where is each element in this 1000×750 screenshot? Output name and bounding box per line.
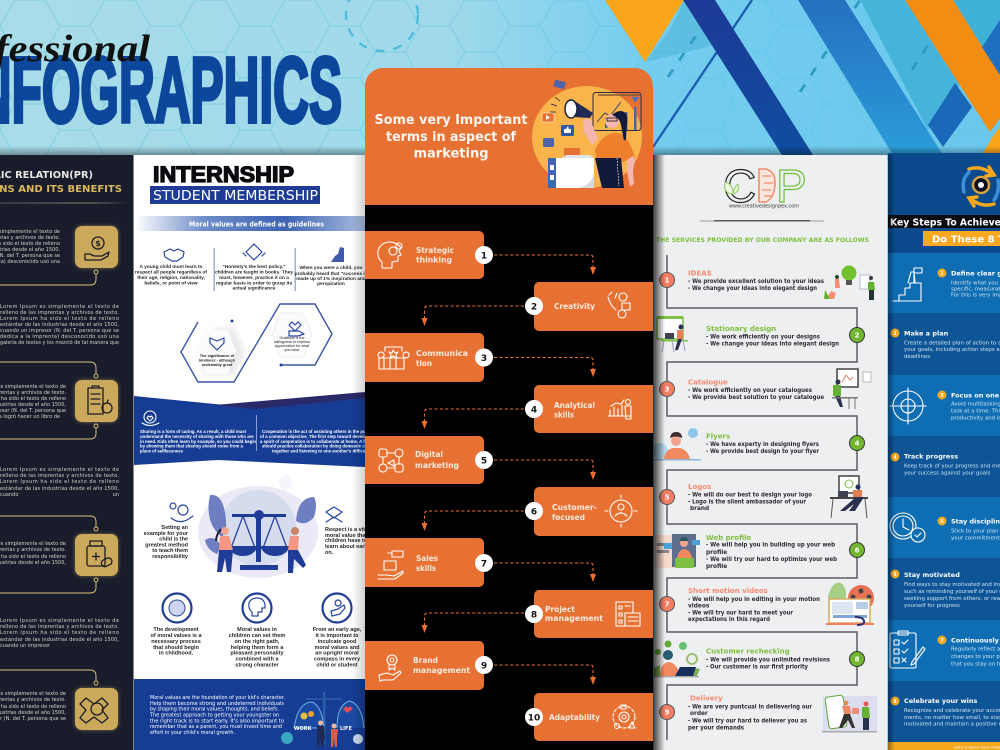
arrow 5 xyxy=(494,460,596,480)
service 6: web profile xyxy=(655,534,864,570)
hex text: gratitude: you have xyxy=(285,348,299,352)
circle item: development xyxy=(150,594,202,656)
service 1: ideas: IDEAS xyxy=(688,270,712,278)
text block 7 xyxy=(0,691,66,722)
text block 4: relleno de las imprentas y archivos de texto. xyxy=(0,473,119,479)
service 2: stationary design xyxy=(657,316,864,352)
step 5: digital marketing xyxy=(355,436,493,484)
step 1: strategic thinking: Strategic xyxy=(416,246,454,255)
step 9: brand management: Brand xyxy=(413,656,438,665)
panel: key steps xyxy=(888,153,1000,750)
step 1: strategic thinking xyxy=(355,231,493,279)
circle item: early age: child or student xyxy=(316,662,358,668)
text: responsibility: example for your xyxy=(144,531,189,537)
step 3: focus on one: Focus on one xyxy=(951,392,1000,400)
column: success xyxy=(295,247,368,287)
text block 4: Lorem Ipsum es simplemente el texto de xyxy=(0,467,119,473)
footer text: effort in your child's moral growth. xyxy=(150,730,235,736)
hexagon diagram xyxy=(181,304,332,382)
service 8: customer rechecking: 8 xyxy=(855,656,860,664)
step 2: creativity: Creativity xyxy=(554,302,596,311)
illustration: work life balance xyxy=(281,692,364,747)
sharing text: by showing them that sharing should come from a xyxy=(140,444,244,448)
text: responsibility: responsibility xyxy=(152,554,189,560)
text block 4: un xyxy=(113,492,119,498)
step 3: communication: tion xyxy=(416,359,432,368)
service 7: short motion videos: videos xyxy=(688,604,710,610)
step 3: communication xyxy=(355,333,493,382)
hex text: kindness: undeniably great xyxy=(202,363,233,367)
cooperation text: Cooperation is the act of assisting others in the pursuit xyxy=(262,429,375,434)
circle item: early age: From an early age, xyxy=(313,627,362,633)
text: respect: moral value that xyxy=(325,533,367,539)
step 7: continuously evaluate xyxy=(890,631,1000,668)
logo: CDP: P xyxy=(776,160,807,212)
illustration: flyer man xyxy=(652,428,701,460)
step 5: digital marketing: 5 xyxy=(481,456,487,466)
illustration: desk worker xyxy=(657,316,688,352)
footer text: the right track is to start early. It's also important to xyxy=(150,718,285,724)
text block 4 xyxy=(0,467,119,498)
step 2: make a plan: deadlines xyxy=(904,354,930,360)
service 5: logos: brand xyxy=(690,506,709,512)
column: respect people xyxy=(135,249,207,286)
footer text: Moral values are the foundation of your kid's character. xyxy=(150,695,285,701)
text block 2: cuando un impresor (N. del T. persona que se xyxy=(0,328,119,334)
heading: marketing xyxy=(374,113,528,162)
service 6: web profile: Web profile xyxy=(706,534,752,542)
column: honesty xyxy=(215,244,293,292)
service 8: customer rechecking xyxy=(654,640,864,677)
circle item: development: that should begin xyxy=(153,645,200,651)
column: success: made up of 1% inspiration and xyxy=(296,276,366,282)
circle item: early age xyxy=(313,594,362,668)
arrow 6 xyxy=(422,511,524,531)
text: responsibility: child is the xyxy=(159,536,188,542)
footer text: by shaping their moral values, thoughts, and beliefs. xyxy=(150,706,279,712)
service 9: delivery: order xyxy=(690,711,708,717)
icon: sales hand xyxy=(378,551,403,579)
illustration: customer support xyxy=(654,640,700,677)
step 6: stay motivated: yourself for progress xyxy=(904,603,960,609)
circle item: early age: it is important to xyxy=(315,633,359,639)
step 8: celebrate your wins: 8 xyxy=(893,699,897,705)
column: respect people: respect all people regardless of xyxy=(135,270,207,276)
arrow 4 xyxy=(422,409,524,429)
circle item: early age: moral values and xyxy=(315,645,359,651)
heading: marketing: Some very Important xyxy=(374,113,528,128)
text block 4: estándar de las industrias desde el año 1500, xyxy=(0,485,119,492)
icon: meeting xyxy=(378,347,409,369)
text: responsibility: to teach them xyxy=(152,548,188,554)
icon: social network xyxy=(379,449,403,472)
cooperation text xyxy=(260,430,365,454)
illustration: video editing xyxy=(826,583,874,625)
circle item: right path xyxy=(229,594,285,668)
column: respect people: beliefs, or point of view xyxy=(144,280,198,286)
circle item: development: necessary process xyxy=(151,639,201,645)
step 6: stay motivated: 6 xyxy=(893,572,897,578)
step 8: celebrate your wins: Celebrate your wins xyxy=(904,697,977,705)
footer strip: source xyxy=(888,742,1000,750)
arrow 1 xyxy=(494,255,596,275)
text block 6: relleno de las imprentas y archivos de texto. xyxy=(0,624,119,630)
text block 2: galería de textos y los mezcló de tal manera que xyxy=(0,339,119,346)
blue band: sharing and cooperation xyxy=(134,392,377,467)
decorative diagonal bands xyxy=(605,0,1000,155)
heading: services: THE SERVICES PROVIDED BY OUR COMPANY ARE AS FOLLOWS xyxy=(656,236,869,244)
sharing text: in need. Kids often learn by example, so you could begin xyxy=(140,439,256,444)
text block 6 xyxy=(0,618,119,649)
icon: adaptive gear xyxy=(613,705,635,728)
step 4: track progress: your success against your goals xyxy=(904,470,991,476)
step 7: sales skills xyxy=(355,538,493,587)
cooperation text: should practice collaboration by doing domestic chores xyxy=(262,444,377,448)
column: respect people: their age, religion, nationality, xyxy=(137,275,205,281)
cooperation text: a spirit of cooperation is to collaborate at home. A family xyxy=(260,439,376,444)
footer text xyxy=(149,695,285,736)
icon: medicine bottle xyxy=(75,534,118,576)
panel edge shadows xyxy=(133,155,895,750)
service 6: web profile: 6 xyxy=(855,546,860,554)
icon: creativity xyxy=(608,292,630,318)
service 6: web profile: profile xyxy=(706,550,727,556)
step 7: sales skills: skills xyxy=(416,564,436,573)
service 6: web profile: profile xyxy=(706,564,727,570)
text block 2: relleno de las imprentas y archivos de texto. xyxy=(0,310,119,316)
text: responsibility: greatest method xyxy=(145,542,188,548)
step 6: customer-focused xyxy=(525,487,663,536)
step 8: project management: 8 xyxy=(531,610,537,620)
step 9: brand management xyxy=(355,641,493,690)
circle item: early age: inculcate good xyxy=(318,639,356,645)
step 7: sales skills: Sales xyxy=(416,554,438,563)
step 8: celebrate your wins: ments, no matter how small, to stay xyxy=(904,715,1000,721)
heading: student membership: STUDENT MEMBERSHIP xyxy=(153,189,318,204)
circle item: right path: combined with a xyxy=(235,656,279,662)
step 3: communication: Communica xyxy=(416,349,468,358)
text block 2: dedica a la imprenta) desconocido usó una xyxy=(0,333,119,340)
figure: woman xyxy=(216,527,233,572)
arrow 7 xyxy=(494,563,596,582)
icon: project board xyxy=(616,602,640,626)
text: respect xyxy=(325,527,365,554)
service 4: flyers: - We have experty in designing flyers xyxy=(706,442,819,448)
step 8: project management: management xyxy=(545,614,603,623)
hex text: gratitude: appreciation for what xyxy=(275,344,309,348)
illustration: scales of justice xyxy=(198,474,318,578)
box xyxy=(548,155,594,188)
service 5: logos xyxy=(660,476,868,518)
step 6: customer-focused: Customer- xyxy=(552,503,597,512)
hex text: kindness xyxy=(199,338,236,367)
column: honesty: children are taught in books. They xyxy=(215,270,293,276)
text: respect: learn about early xyxy=(325,544,370,550)
text: responsibility xyxy=(144,525,189,560)
icon: head gears xyxy=(378,242,402,268)
sharing text xyxy=(140,429,256,454)
service 3: catalogue: 3 xyxy=(665,386,670,394)
text: respect: on. xyxy=(325,550,334,556)
service 7: short motion videos: - We will try our hard to meet your xyxy=(688,610,793,616)
band: moral values xyxy=(135,216,365,231)
service 9: delivery: per your demands xyxy=(688,726,745,732)
panel: internship xyxy=(134,155,377,750)
service 9: delivery: 9 xyxy=(665,708,670,716)
illustration: work life balance: LIFE xyxy=(340,726,352,732)
text block 4: cuando xyxy=(0,492,18,498)
service 3: catalogue: - We provide best solution to your catalogue xyxy=(688,395,824,401)
step 3: focus on one xyxy=(890,388,1000,424)
text block 6: estándar de las industrias desde el año 1500, xyxy=(0,636,119,643)
circle item: right path: strong character xyxy=(235,662,280,668)
text block 2: Lorem Ipsum ha sido el texto de relleno xyxy=(0,316,119,322)
megaphone xyxy=(550,97,593,118)
service 7: short motion videos: 7 xyxy=(665,600,670,608)
sharing text: place of selflessness xyxy=(140,448,184,454)
connector lines xyxy=(0,270,98,685)
service 6: web profile: - We will try our hard to optimize your web xyxy=(706,557,837,563)
illustration: work life balance: WORK xyxy=(294,726,313,732)
illustration: marketer with megaphone xyxy=(532,80,642,188)
text: responsibility: Setting an xyxy=(161,525,189,531)
step 8: project management: Project xyxy=(545,605,575,614)
text block 2: Lorem Ipsum es simplemente el texto de xyxy=(0,304,119,310)
service 1: ideas: - We change your ideas into elegant design xyxy=(688,286,817,292)
step 4: track progress: Track progress xyxy=(904,452,958,460)
banner bottom shadow xyxy=(0,146,1000,155)
column: honesty: actual significance xyxy=(233,286,276,292)
step 8: celebrate your wins xyxy=(890,696,1000,728)
figure: man xyxy=(288,527,306,573)
service 8: customer rechecking: Customer rechecking xyxy=(706,648,790,656)
column: success: When you were a child, you xyxy=(300,265,363,271)
icon: cycle arrows xyxy=(963,167,998,206)
text block 2 xyxy=(0,304,119,346)
service 5: logos: Logos xyxy=(688,483,711,491)
circle item: development: The development xyxy=(153,627,199,633)
heading: public relation xyxy=(0,170,131,204)
icon: joined hands xyxy=(75,688,118,730)
service 1: ideas: - We provide excellent solution to your ideas xyxy=(688,279,824,285)
circle item: development: of moral values is a xyxy=(150,633,202,639)
step 2: make a plan: 2 xyxy=(893,331,897,337)
circle item: right path: children can set them xyxy=(229,633,285,639)
service 3: catalogue: - We work efficiently on your catalogues xyxy=(688,388,813,394)
step 9: brand management: 9 xyxy=(481,662,487,672)
service 8: customer rechecking: - Our customer is our first priority xyxy=(706,664,808,670)
service 5: logos: - We will do our best to design your logo xyxy=(688,492,812,498)
heading: marketing: terms in aspect of xyxy=(386,130,516,145)
service 2: stationary design: - We work efficiently on your designs xyxy=(706,334,821,340)
circle item: development: in childhood. xyxy=(159,650,194,656)
arrow 8 xyxy=(422,613,524,633)
step 2: creativity xyxy=(525,282,663,331)
step 3: communication: 3 xyxy=(481,354,487,364)
cooperation text: of a common objective. The first step toward developing xyxy=(260,434,375,439)
icon: gear hand xyxy=(170,503,193,522)
icon: brand hand xyxy=(379,655,401,681)
arrow 9 xyxy=(494,665,596,685)
icon: chart person xyxy=(608,400,631,419)
column: honesty: regular basis in order to grasp its xyxy=(216,280,292,286)
step 8: project management xyxy=(525,590,663,638)
step 6: stay motivated: Stay motivated xyxy=(904,571,960,579)
service 4: flyers xyxy=(652,428,864,460)
panel: our services xyxy=(652,155,887,750)
step 1: strategic thinking: thinking xyxy=(416,256,452,264)
logo: CDP: C xyxy=(723,160,756,212)
hex text: kindness: The significance of xyxy=(200,354,235,358)
step 4: analytical skills: 4 xyxy=(531,406,537,416)
footer text: remember that as a parent, you must invest time and xyxy=(150,724,282,730)
title: infographics xyxy=(0,28,342,142)
panel: public relation xyxy=(0,155,133,750)
hex text: gratitude: Gratitude is the xyxy=(279,336,305,340)
step 6: customer-focused: 6 xyxy=(531,508,537,518)
column: respect people: A young child must learn to xyxy=(140,264,203,270)
text block 4: Lorem Ipsum ha sido el texto de relleno xyxy=(0,479,119,485)
step 7: continuously evaluate: 7 xyxy=(940,638,944,644)
service 4: flyers: 4 xyxy=(855,440,860,448)
icon: respect hands xyxy=(326,507,342,522)
text: respect: children have to xyxy=(325,538,368,544)
circle item: right path: pleasant personality xyxy=(230,650,285,656)
text block 5 xyxy=(0,541,66,566)
step 1: define clear goals: 1 xyxy=(940,271,944,277)
circle item: right path: on the right path, xyxy=(235,639,280,645)
footer panel: moral foundation xyxy=(134,679,365,750)
step 5: digital marketing: Digital xyxy=(415,450,443,459)
hex text: gratitude: willingness to express xyxy=(274,340,310,344)
step 5: stay disciplined xyxy=(890,513,1000,542)
heading: do these xyxy=(923,231,1000,246)
step 6: stay motivated xyxy=(890,570,1000,609)
service 3: catalogue xyxy=(660,369,871,409)
band: moral values: Moral values are defined as guidelines xyxy=(189,220,324,228)
service 7: short motion videos: Short motion videos xyxy=(688,587,768,595)
service 2: stationary design: 2 xyxy=(855,332,860,340)
step 4: analytical skills xyxy=(525,385,663,433)
step 4: track progress: 4 xyxy=(893,455,897,461)
illustration: idea bulb xyxy=(824,266,875,300)
service 6: web profile: - We will help you in building up your web xyxy=(706,542,835,548)
step 10: adaptability: Adaptability xyxy=(549,713,601,722)
text block 2: estándar de las industrias desde el año 1500, xyxy=(0,321,119,328)
step 7: sales skills: 7 xyxy=(481,560,487,570)
step 4: track progress xyxy=(890,452,1000,476)
icon: sharing heart xyxy=(142,411,159,426)
service 4: flyers: Flyers xyxy=(706,432,730,440)
icon: money hand: $ xyxy=(95,239,101,248)
top banner background xyxy=(0,0,1000,160)
step 2: make a plan: Make a plan xyxy=(904,330,949,338)
circle item: early age: compass in every xyxy=(314,656,361,662)
step 6: customer-focused: focused xyxy=(552,513,585,522)
service 5: logos: 5 xyxy=(665,494,670,502)
text block 6: cuando un impresor xyxy=(0,643,51,649)
circle item: right path: helping them form a xyxy=(231,645,284,651)
illustration: logo designer xyxy=(830,476,868,518)
step 2: creativity: 2 xyxy=(531,302,537,312)
arrow 3 xyxy=(494,358,596,377)
icon: customer focus xyxy=(605,495,637,527)
icon: clipboard apple xyxy=(75,380,118,422)
step 3: focus on one: 3 xyxy=(940,393,944,399)
service 7: short motion videos: expectations in this regard xyxy=(688,617,770,623)
text block 1 xyxy=(0,229,60,265)
service 7: short motion videos: - We will help you in editing in your motion xyxy=(688,597,820,603)
column: success: perspiration xyxy=(317,281,345,287)
footer text: The greatest approach to getting your youngster on xyxy=(149,712,279,718)
service 2: stationary design: Stationary design xyxy=(706,325,776,333)
timeline connector xyxy=(667,255,857,740)
hex text: gratitude xyxy=(274,322,310,352)
service 1: ideas: 1 xyxy=(665,276,670,284)
column: honesty: must, however, practice it on a xyxy=(219,275,289,281)
logo: CDP xyxy=(723,160,807,212)
heading: marketing: marketing xyxy=(414,146,488,162)
step 4: analytical skills: Analytical xyxy=(554,401,595,410)
logo: CDP: www.creativedesignpex.com xyxy=(729,204,799,210)
step 9: brand management: management xyxy=(413,666,470,675)
service 7: short motion videos xyxy=(660,583,874,625)
service 4: flyers: - We provide best design to your flyer xyxy=(706,449,819,455)
column: honesty: "Honesty's the best policy," xyxy=(222,264,286,270)
illustration: web profile xyxy=(655,534,700,568)
cooperation text: together and listening to one another's difficulties xyxy=(272,448,375,454)
arrow 2 xyxy=(422,306,524,326)
service 9: delivery: - We will try our hard to deliever you as xyxy=(688,718,807,724)
text block 6: Lorem Ipsum ha sido el texto de relleno xyxy=(0,630,119,636)
text: respect: Respect is a vital xyxy=(325,527,370,533)
icon: money hand xyxy=(75,226,118,268)
step 10: adaptability xyxy=(525,693,663,741)
service 1: ideas xyxy=(660,266,875,300)
step 1: define clear goals xyxy=(893,268,1000,301)
step 5: stay disciplined: 5 xyxy=(940,519,944,525)
step 5: digital marketing: marketing xyxy=(415,461,459,470)
step 4: analytical skills: skills xyxy=(554,410,574,420)
text block 6: Lorem Ipsum es simplemente el texto de xyxy=(0,618,119,624)
hex text: kindness: kindness - although xyxy=(199,358,236,362)
service 5: logos: - Logo is the silent ambassador of your xyxy=(688,500,806,506)
column: success: probably heard that "success is xyxy=(295,271,368,277)
circle item: right path: Moral values in xyxy=(237,627,278,633)
sharing text: Sharing is a form of caring. As a result, a child must xyxy=(140,429,247,434)
service 8: customer rechecking: - We will provide you unlimited revisions xyxy=(706,658,831,664)
text block 3 xyxy=(0,384,66,420)
footer text: Help them become strong and undeterred individuals xyxy=(150,701,284,707)
illustration: delivery xyxy=(822,695,877,732)
service 3: catalogue: Catalogue xyxy=(688,378,728,386)
service 9: delivery xyxy=(660,694,877,732)
step 10: adaptability: 10 xyxy=(528,714,540,724)
service 9: delivery: - We are very puntcual in delievering our xyxy=(688,704,812,710)
illustration: designer at board xyxy=(832,369,871,409)
sharing text: understand the necessity of sharing with those who are xyxy=(140,434,254,439)
woman figure xyxy=(583,111,635,188)
heading: internship: INTERNSHIP xyxy=(153,162,294,187)
panel: marketing terms xyxy=(355,68,663,750)
service 9: delivery: Delivery xyxy=(690,694,723,702)
step 2: make a plan xyxy=(890,328,1000,360)
step 1: strategic thinking: 1 xyxy=(481,252,487,262)
circle item: early age: an upright moral xyxy=(315,650,359,656)
service 2: stationary design: - We change your ideas into elegant design xyxy=(706,342,839,348)
